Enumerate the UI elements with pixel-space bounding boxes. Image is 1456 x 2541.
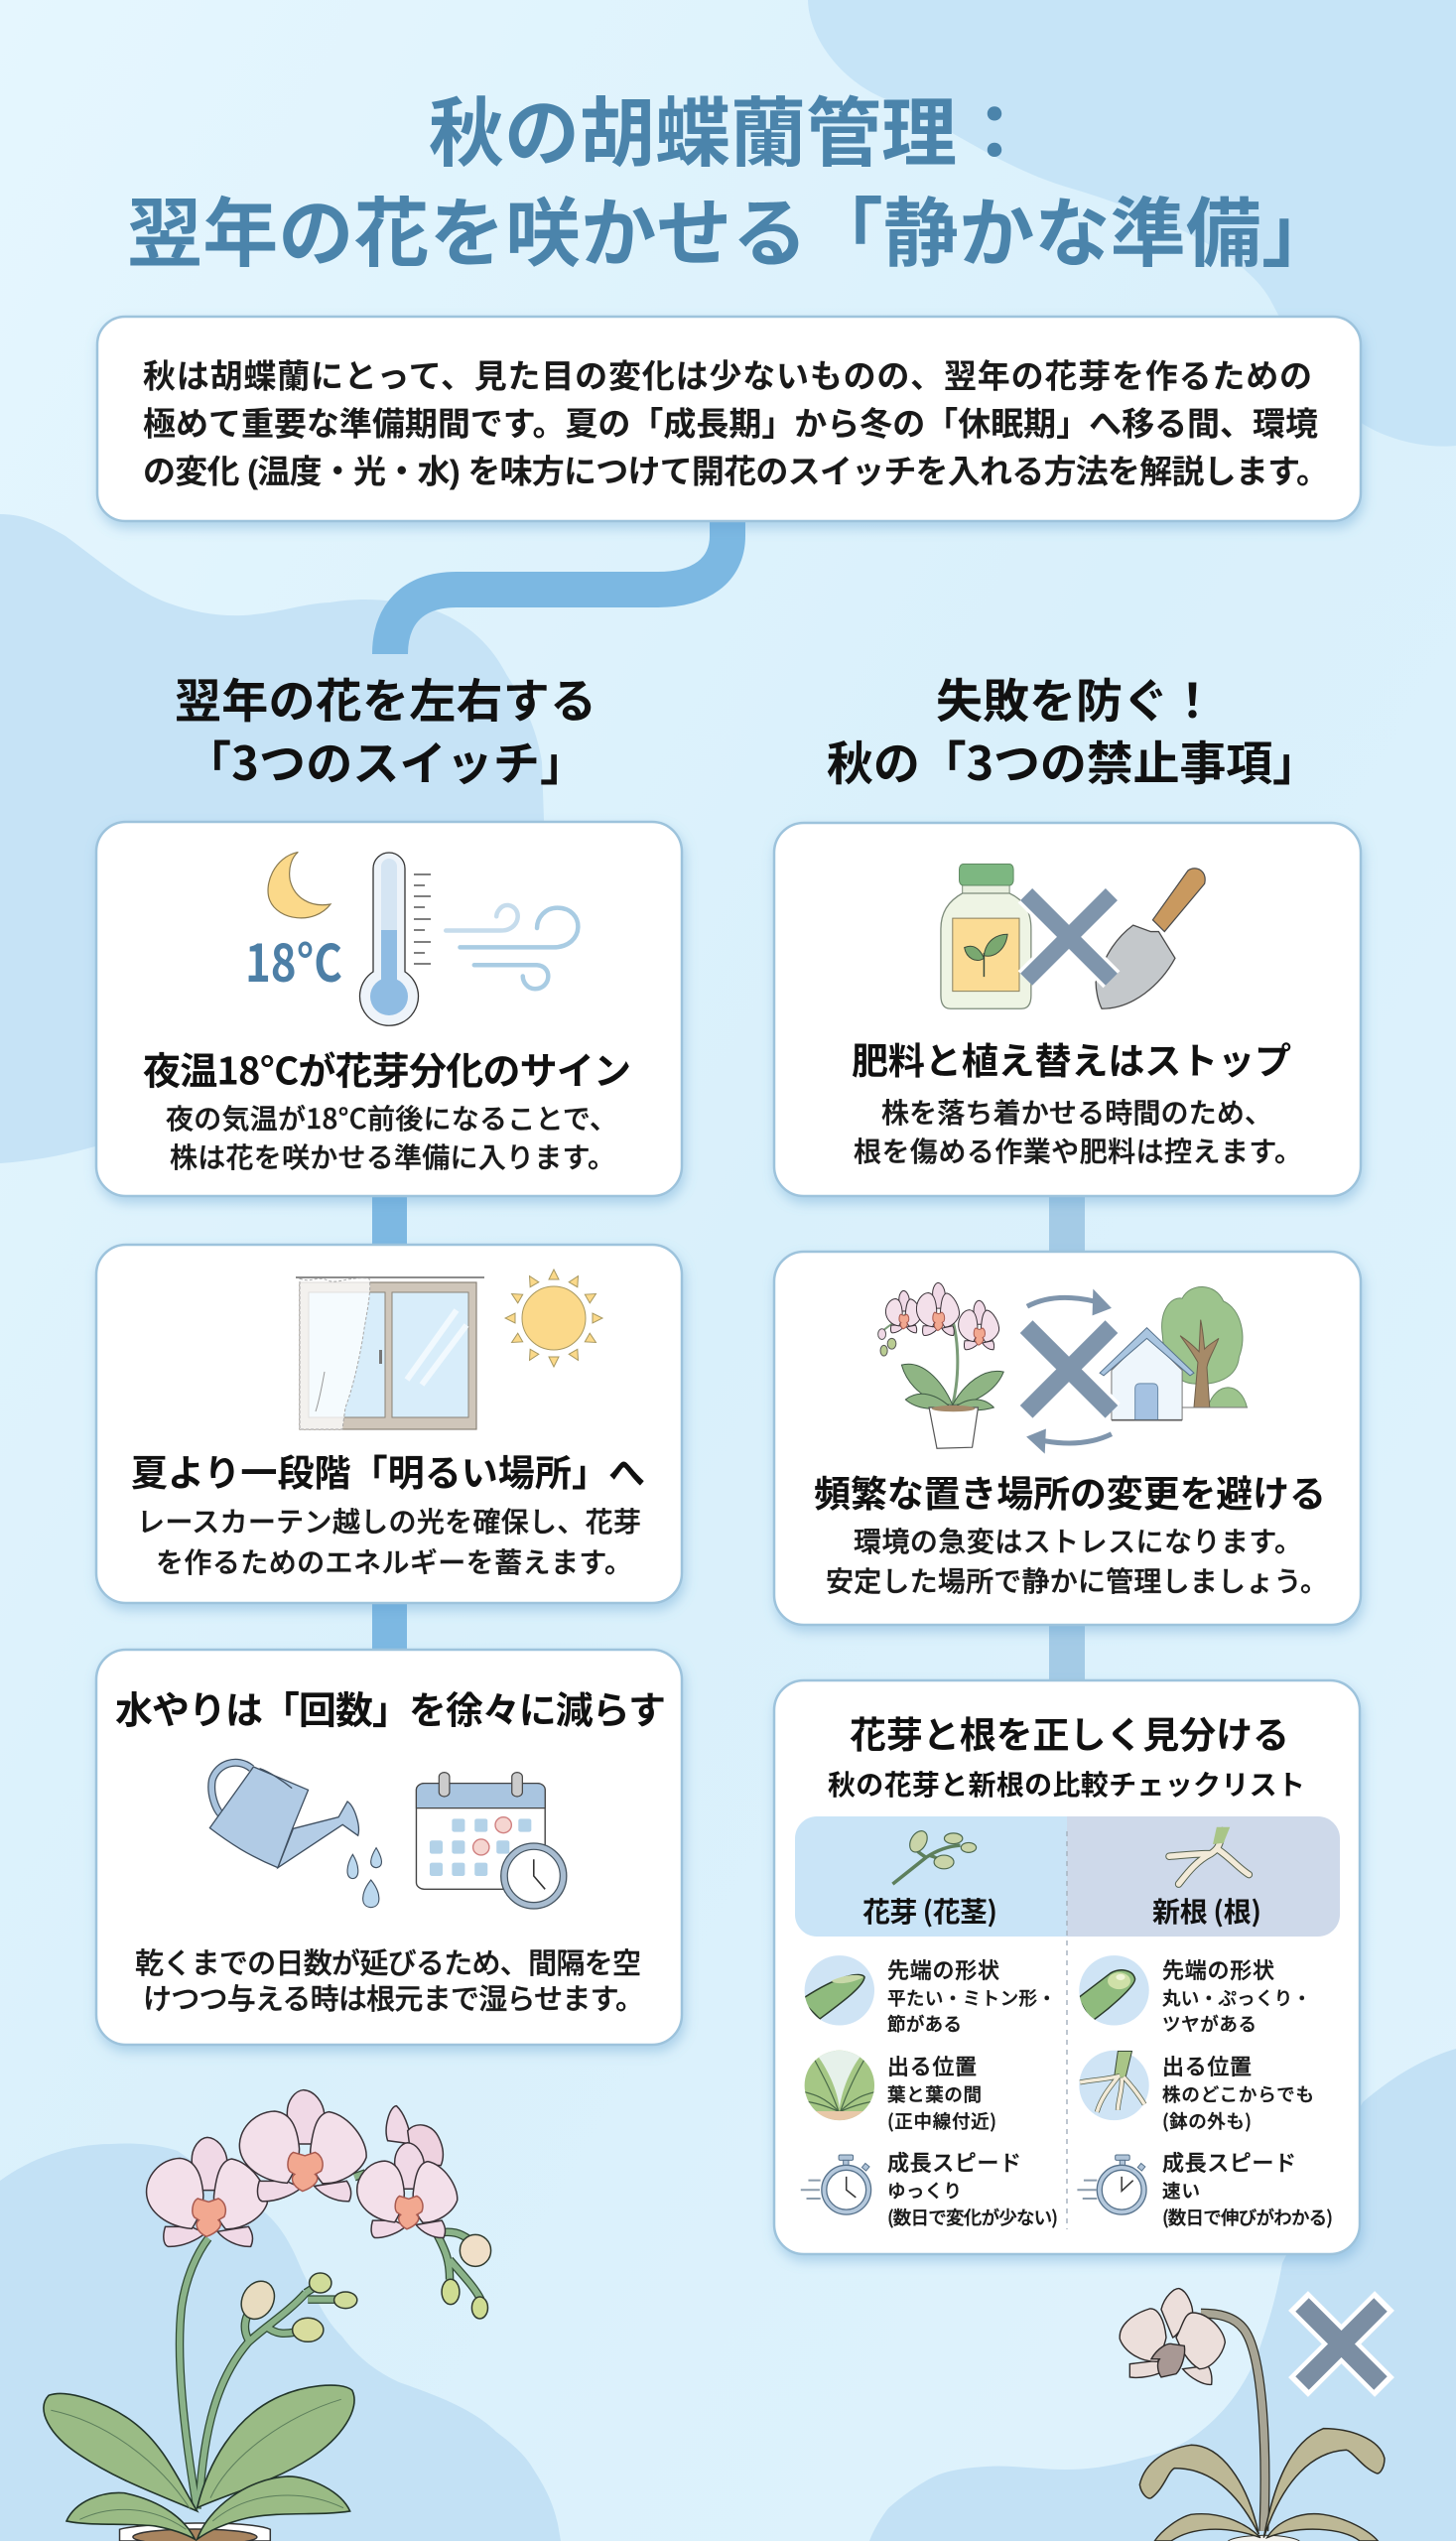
card text: 株を落ち着かせる時間のため、 (881, 1092, 1272, 1132)
left column text: 成長スピード (887, 2146, 1021, 2178)
icon: watering can and drops (209, 1763, 381, 1908)
right column text: 速い (1162, 2178, 1200, 2204)
icon: stopwatch fast (1077, 2155, 1146, 2214)
icon: flat tip (801, 1955, 874, 2026)
icon: flower bud sprig (892, 1828, 977, 1884)
icon: moon, thermometer and wind (268, 852, 578, 1025)
panel: stop fertilizer and repotting (774, 823, 1361, 1196)
comparison header band (795, 1816, 1340, 1937)
icon: cross (1026, 1327, 1112, 1411)
panel: bright place (96, 1245, 682, 1603)
left connectors (372, 1191, 407, 1656)
right connectors (1049, 1191, 1085, 1685)
panel: watering (96, 1650, 682, 2045)
label: 18°C: 18°C (245, 922, 342, 997)
icon: large cross (1298, 2301, 1385, 2387)
heading: left column: 翌年の花を左右する (175, 663, 596, 732)
divider (1066, 1831, 1068, 2229)
left column text: 葉と葉の間 (887, 2081, 982, 2107)
card text (826, 1521, 1328, 1600)
icon: roots (1079, 2051, 1149, 2120)
heading: left column: 「3つのスイッチ」 (185, 726, 587, 794)
icon: calendar with clock (416, 1773, 567, 1909)
left column text: 節がある (887, 2011, 962, 2037)
heading: right column (827, 663, 1319, 794)
right column text (1162, 1953, 1333, 2230)
title: 翌年の花を咲かせる「静かな準備」 (127, 173, 1337, 282)
right column text: (鉢の外も) (1162, 2108, 1252, 2134)
card subheading: 秋の花芽と新根の比較チェックリスト (828, 1764, 1305, 1804)
right column text: ツヤがある (1162, 2011, 1257, 2037)
icon: root (1169, 1827, 1249, 1884)
card heading: 水やりは「回数」を徐々に減らす (115, 1679, 666, 1735)
card text: 根を傷める作業や肥料は控えます。 (854, 1131, 1302, 1170)
pot (120, 2523, 270, 2541)
card text (137, 1501, 641, 1581)
lower leaves (1154, 2514, 1378, 2541)
connector: intro to left column (390, 516, 728, 654)
card heading: 肥料と植え替えはストップ (852, 1031, 1291, 1085)
card text (166, 1098, 617, 1176)
left column text: 先端の形状 (887, 1953, 999, 1985)
right column text: 成長スピード (1162, 2146, 1296, 2178)
title: 秋の胡蝶蘭管理： (429, 72, 1032, 182)
left column text: 平たい・ミトン形・ (887, 1985, 1056, 2011)
icon: potted orchid (878, 1282, 1003, 1448)
right column text: (数日で伸びがわかる) (1162, 2205, 1333, 2230)
right column text: 株のどこからでも (1162, 2081, 1314, 2107)
card heading: 頻繁な置き場所の変更を避ける (814, 1464, 1326, 1518)
card text (135, 1940, 644, 2018)
card text: レースカーテン越しの光を確保し、花芽 (137, 1501, 641, 1540)
icon: stopwatch slow (801, 2155, 871, 2214)
icon: fertilizer bottle (941, 865, 1031, 1008)
left column text: 出る位置 (887, 2050, 977, 2081)
icon: cross (1026, 894, 1112, 980)
arrows: moving back and forth (1026, 1289, 1112, 1454)
card text: 乾くまでの日数が延びるため、間隔を空 (135, 1940, 641, 1982)
right column text: 先端の形状 (1162, 1953, 1274, 1985)
flower (1120, 2289, 1225, 2384)
panel: night temperature (96, 822, 682, 1196)
card text: けつつ与える時は根元まで湿らせます。 (143, 1976, 644, 2018)
right column text: 出る位置 (1162, 2050, 1252, 2081)
left column text: (正中線付近) (887, 2108, 996, 2134)
intro text: 極めて重要な準備期間です。夏の「成長期」から冬の「休眠期」へ移る間、環境 (143, 405, 1318, 443)
card heading: 夜温18°Cが花芽分化のサイン (143, 1040, 631, 1096)
icon: round tip (1078, 1955, 1149, 2026)
leaves (44, 2385, 354, 2539)
illustration: wilted orchid (1120, 2289, 1385, 2541)
card text: を作るためのエネルギーを蓄えます。 (156, 1541, 632, 1581)
heading: right column: 失敗を防ぐ！ (936, 663, 1216, 732)
card text: 夜の気温が18°C前後になることで、 (166, 1098, 617, 1137)
pot rim (1228, 2535, 1300, 2541)
intro text: の変化 (温度・光・水) を味方につけて開花のスイッチを入れる方法を解説します。 (143, 453, 1329, 490)
icon: sun (505, 1270, 602, 1367)
intro text (143, 357, 1329, 490)
upper leaves (1139, 2429, 1385, 2538)
right column text: 丸い・ぷっくり・ (1162, 1985, 1311, 2011)
icon: window with lace curtain (296, 1277, 484, 1429)
stem (1201, 2314, 1264, 2531)
panel: avoid moving (774, 1252, 1361, 1625)
card heading: 夏より一段階「明るい場所」へ (131, 1443, 645, 1497)
panel: intro (97, 317, 1361, 521)
stems and buds (180, 2173, 491, 2509)
card text: 安定した場所で静かに管理しましょう。 (826, 1560, 1328, 1600)
card text (854, 1092, 1302, 1170)
column label: flower bud: 花芽 (花茎) (862, 1891, 997, 1931)
card text: 株は花を咲かせる準備に入ります。 (170, 1137, 615, 1176)
panel: flower bud vs root comparison (774, 1680, 1360, 2254)
heading: left column (175, 663, 596, 794)
intro text: 秋は胡蝶蘭にとって、見た目の変化は少ないものの、翌年の花芽を作るための (143, 357, 1312, 395)
icon: leaf axil (804, 2051, 874, 2120)
card heading: 花芽と根を正しく見分ける (850, 1705, 1289, 1759)
left column text: ゆっくり (887, 2178, 962, 2204)
card text: 環境の急変はストレスになります。 (854, 1521, 1302, 1560)
left column text: (数日で変化が少ない) (887, 2205, 1058, 2230)
heading: right column: 秋の「3つの禁止事項」 (827, 726, 1319, 794)
left column text (887, 1953, 1058, 2230)
icon: garden trowel (1096, 869, 1205, 1008)
column label: new root: 新根 (根) (1152, 1891, 1261, 1931)
illustration: healthy orchid (44, 2090, 491, 2541)
title (127, 72, 1337, 282)
icon: house and tree (1100, 1286, 1248, 1420)
flowers (147, 2090, 458, 2246)
